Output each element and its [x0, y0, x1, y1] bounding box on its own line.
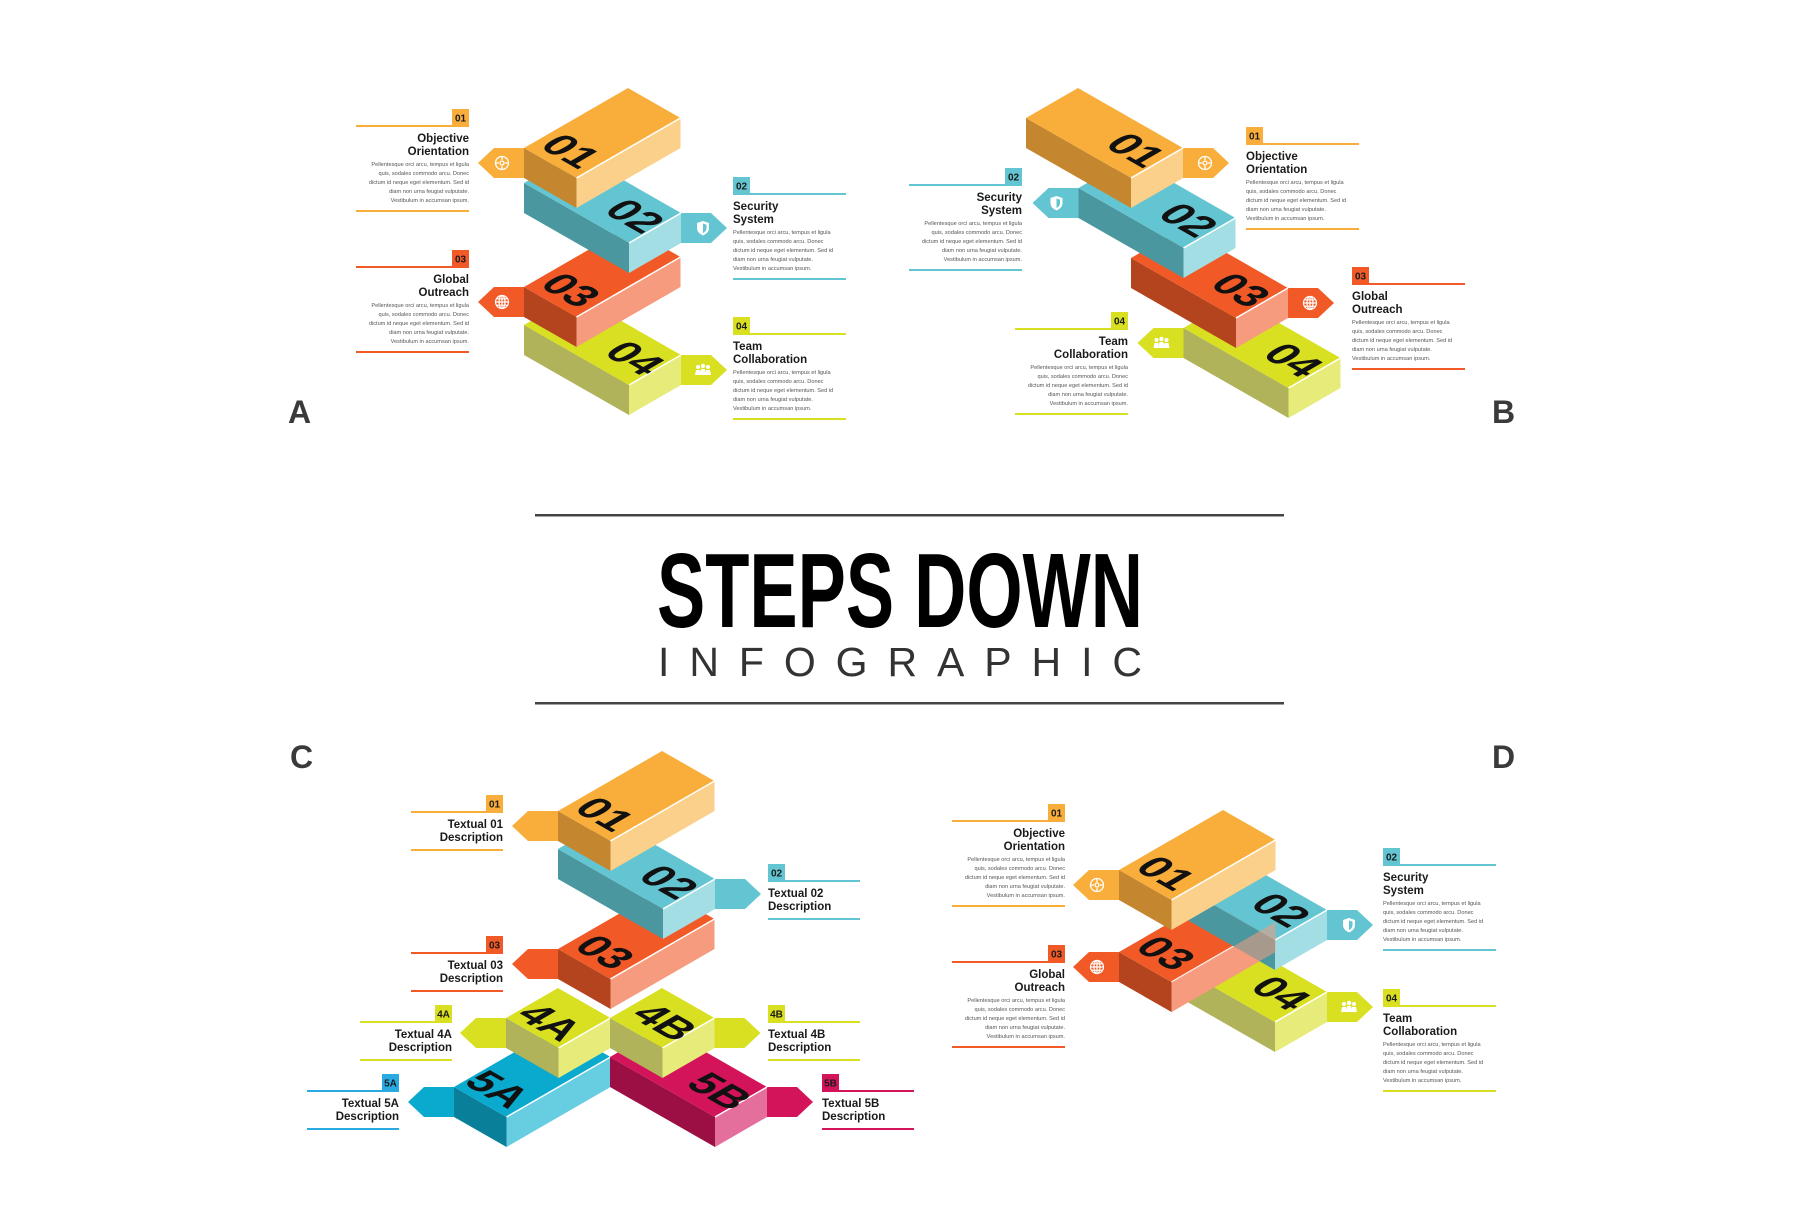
icon: globe — [496, 296, 508, 308]
text B 03 — [1352, 267, 1465, 370]
text A 04: dictum id neque eget elementum. Sed id — [733, 388, 833, 394]
text D 01: diam non urna feugiat vulputate. — [985, 884, 1065, 890]
tab B 03 — [1288, 288, 1334, 318]
text A 01: Vestibulum in accumsan ipsum. — [391, 198, 469, 204]
block A 04 — [524, 295, 727, 415]
text D 02: Vestibulum in accumsan ipsum. — [1383, 937, 1462, 943]
text D 04: dictum id neque eget elementum. Sed id — [1383, 1060, 1483, 1066]
text C 02: 02 — [771, 868, 782, 880]
text B 01: Orientation — [1246, 164, 1307, 176]
text B 04 — [1015, 312, 1129, 415]
text B 02: quis, sodales commodo arcu. Donec — [932, 230, 1022, 236]
number 4B: 4B — [621, 997, 709, 1047]
text A 03: Outreach — [418, 287, 469, 299]
number 03: 03 — [1125, 930, 1207, 976]
icon: shield — [1050, 196, 1062, 210]
text A 03: Vestibulum in accumsan ipsum. — [391, 339, 469, 345]
tab C 02 — [715, 879, 761, 909]
text B 03: dictum id neque eget elementum. Sed id — [1352, 338, 1452, 344]
text B 02: dictum id neque eget elementum. Sed id — [922, 239, 1022, 245]
text A 03: diam non urna feugiat vulputate. — [389, 330, 469, 336]
text D 02 — [1383, 848, 1496, 951]
tab C 5A — [408, 1087, 454, 1117]
tab C 03 — [512, 949, 558, 979]
number 5A: 5A — [454, 1064, 542, 1114]
text B 03: diam non urna feugiat vulputate. — [1352, 347, 1432, 353]
text B 03: quis, sodales commodo arcu. Donec — [1352, 329, 1443, 335]
text D 02: Pellentesque orci arcu, tempus et ligula — [1383, 901, 1481, 907]
text D 02: Security — [1383, 872, 1428, 884]
text B 01: Vestibulum in accumsan ipsum. — [1246, 216, 1325, 222]
block B 04 — [1138, 298, 1340, 418]
text A 04: diam non urna feugiat vulputate. — [733, 397, 813, 403]
text D 02: System — [1383, 885, 1424, 897]
text A 04: Vestibulum in accumsan ipsum. — [733, 406, 812, 412]
icon: target — [1198, 156, 1212, 170]
text C 01: 01 — [489, 800, 500, 810]
text C 5B: 5B — [824, 1078, 837, 1090]
text C 01: Description — [440, 832, 503, 844]
text D 03: quis, sodales commodo arcu. Donec — [975, 1007, 1065, 1013]
tab C 4A — [460, 1018, 506, 1048]
text A 03: 03 — [455, 254, 466, 266]
number 04: 04 — [594, 335, 676, 382]
block B 01 — [1026, 88, 1229, 208]
text C 5B: Description — [822, 1111, 885, 1123]
text A 04: Team — [733, 341, 762, 353]
panel A — [356, 88, 846, 420]
subtitle: INFOGRAPHIC: INFOGRAPHIC — [658, 639, 1142, 685]
text B 01: dictum id neque eget elementum. Sed id — [1246, 198, 1346, 204]
block D 01 — [1073, 810, 1276, 930]
text B 04: Collaboration — [1054, 349, 1128, 361]
tab B 04 — [1138, 328, 1184, 358]
panel letter A: A — [288, 394, 311, 430]
text B 01: Pellentesque orci arcu, tempus et ligula — [1246, 180, 1344, 186]
panel letter B: B — [1492, 394, 1515, 430]
block A 01 — [478, 88, 680, 208]
text A 03: Pellentesque orci arcu, tempus et ligula — [371, 303, 469, 309]
text C 5A: 5A — [384, 1078, 397, 1090]
block D 03 front face overlay — [1172, 922, 1276, 1012]
tab A 03 — [478, 287, 524, 317]
block A 02 — [524, 153, 727, 273]
tab D 04 — [1327, 992, 1373, 1022]
tab C 4B — [714, 1018, 760, 1048]
text A 02 — [733, 177, 846, 280]
text D 01: Objective — [1013, 828, 1065, 840]
block B 02 — [1032, 158, 1236, 278]
text A 01: 01 — [455, 114, 466, 124]
text C 4A — [360, 1005, 452, 1061]
text D 03: Vestibulum in accumsan ipsum. — [987, 1034, 1065, 1040]
text D 02: quis, sodales commodo arcu. Donec — [1383, 910, 1474, 916]
icon: people — [1341, 1001, 1357, 1012]
text B 04: diam non urna feugiat vulputate. — [1048, 392, 1128, 398]
text D 03: Global — [1029, 969, 1065, 981]
text D 03 — [952, 945, 1066, 1048]
number 04: 04 — [1253, 337, 1335, 384]
text A 04: 04 — [736, 322, 747, 332]
block C 5A — [408, 1027, 610, 1147]
text A 02: Pellentesque orci arcu, tempus et ligula — [733, 230, 831, 236]
text B 01: 01 — [1249, 132, 1260, 142]
text C 4B: Textual 4B — [768, 1029, 825, 1041]
text B 03: Pellentesque orci arcu, tempus et ligula — [1352, 320, 1450, 326]
text C 5A: Textual 5A — [342, 1098, 399, 1110]
text A 02: 02 — [736, 182, 747, 192]
icon: shield — [1343, 918, 1355, 932]
text A 01: diam non urna feugiat vulputate. — [389, 189, 469, 195]
text A 01: Objective — [417, 133, 469, 145]
text C 03: 03 — [489, 940, 500, 952]
text B 02 — [909, 168, 1023, 271]
text A 01: dictum id neque eget elementum. Sed id — [369, 180, 469, 186]
text C 4B: 4B — [770, 1010, 783, 1020]
block A 03 — [478, 227, 680, 347]
block C 02 — [558, 819, 761, 939]
icon: target — [1090, 878, 1104, 892]
text A 04: quis, sodales commodo arcu. Donec — [733, 379, 824, 385]
number 02: 02 — [1240, 887, 1322, 933]
text B 04: Team — [1099, 336, 1128, 348]
number 01: 01 — [530, 128, 612, 174]
text A 04 — [733, 317, 846, 420]
tab A 01 — [478, 148, 524, 178]
number 03: 03 — [564, 929, 646, 975]
text A 02: quis, sodales commodo arcu. Donec — [733, 239, 824, 245]
text B 04: quis, sodales commodo arcu. Donec — [1038, 374, 1128, 380]
title: STEPS DOWN: STEPS DOWN — [657, 532, 1143, 650]
text D 01: 01 — [1051, 808, 1062, 820]
text D 01: Vestibulum in accumsan ipsum. — [987, 893, 1065, 899]
text A 02: diam non urna feugiat vulputate. — [733, 257, 813, 263]
text A 01: Pellentesque orci arcu, tempus et ligula — [371, 162, 469, 168]
text D 02: diam non urna feugiat vulputate. — [1383, 928, 1463, 934]
text A 01: Orientation — [408, 146, 469, 158]
number 01: 01 — [1095, 127, 1177, 173]
text D 04: Collaboration — [1383, 1026, 1457, 1038]
panel letter C: C — [290, 739, 313, 775]
text C 5A: Description — [336, 1111, 399, 1123]
text D 03: dictum id neque eget elementum. Sed id — [965, 1016, 1065, 1022]
tab A 02 — [681, 213, 727, 243]
tab D 02 — [1327, 910, 1373, 940]
text C 02: Description — [768, 901, 831, 913]
panel B — [909, 88, 1465, 418]
text C 4B: Description — [768, 1042, 831, 1054]
text A 02: Security — [733, 201, 778, 213]
text C 03: Description — [440, 973, 503, 985]
text C 5A — [307, 1074, 399, 1130]
number 01: 01 — [564, 791, 646, 837]
text C 02 — [768, 864, 860, 920]
text B 03: Vestibulum in accumsan ipsum. — [1352, 356, 1431, 362]
number 02: 02 — [594, 193, 676, 239]
block D 03 — [1073, 892, 1276, 1012]
block C 4A — [460, 988, 610, 1078]
text B 03: Outreach — [1352, 304, 1402, 316]
panel C — [307, 751, 914, 1147]
panel D — [952, 804, 1496, 1092]
number 03: 03 — [530, 267, 612, 313]
block B 03 — [1131, 228, 1334, 348]
text D 04: 04 — [1386, 994, 1397, 1004]
icon: people — [695, 364, 711, 375]
text D 03: Outreach — [1014, 982, 1065, 994]
text C 01 — [411, 795, 504, 851]
text D 04 — [1383, 989, 1496, 1092]
text D 01: quis, sodales commodo arcu. Donec — [975, 866, 1065, 872]
text B 04: Pellentesque orci arcu, tempus et ligula — [1030, 365, 1128, 371]
text A 02: System — [733, 214, 774, 226]
text B 02: diam non urna feugiat vulputate. — [942, 248, 1022, 254]
number 02: 02 — [1148, 197, 1229, 243]
tab C 01 — [512, 811, 558, 841]
text D 04: Vestibulum in accumsan ipsum. — [1383, 1078, 1462, 1084]
text A 03 — [356, 250, 470, 353]
icon: target — [496, 156, 508, 170]
text D 01 — [952, 804, 1066, 907]
text D 01: dictum id neque eget elementum. Sed id — [965, 875, 1065, 881]
text A 04: Collaboration — [733, 354, 807, 366]
text C 02: Textual 02 — [768, 888, 823, 900]
title block — [535, 514, 1284, 704]
panel letter D: D — [1492, 739, 1515, 775]
text B 02: Vestibulum in accumsan ipsum. — [944, 257, 1022, 263]
block C 5B — [610, 1027, 813, 1147]
block C 4B — [610, 988, 760, 1078]
text C 4A: 4A — [437, 1010, 450, 1020]
icon: globe — [1304, 296, 1316, 310]
text B 01: quis, sodales commodo arcu. Donec — [1246, 189, 1337, 195]
text D 04: diam non urna feugiat vulputate. — [1383, 1069, 1463, 1075]
block C 03 — [512, 889, 714, 1009]
text B 02: Pellentesque orci arcu, tempus et ligula — [924, 221, 1022, 227]
text A 01: quis, sodales commodo arcu. Donec — [379, 171, 469, 177]
text A 03: dictum id neque eget elementum. Sed id — [369, 321, 469, 327]
number 01: 01 — [1125, 850, 1207, 896]
text C 4B — [768, 1005, 860, 1061]
number 5B: 5B — [676, 1066, 764, 1116]
text D 04: Pellentesque orci arcu, tempus et ligula — [1383, 1042, 1481, 1048]
text B 02: Security — [977, 192, 1022, 204]
tab B 02 — [1032, 188, 1078, 218]
text A 01 — [356, 109, 470, 212]
text B 01: Objective — [1246, 151, 1298, 163]
icon: globe — [1090, 960, 1104, 974]
text C 4A: Description — [389, 1042, 452, 1054]
text B 01 — [1246, 127, 1359, 230]
tab C 5B — [767, 1087, 813, 1117]
number 4A: 4A — [506, 997, 594, 1047]
text D 03: 03 — [1051, 950, 1062, 960]
block C 01 — [512, 751, 714, 871]
text D 03: diam non urna feugiat vulputate. — [985, 1025, 1065, 1031]
block D 02 — [1170, 850, 1373, 970]
text B 03: Global — [1352, 291, 1388, 303]
text A 03: quis, sodales commodo arcu. Donec — [379, 312, 469, 318]
text B 02: System — [981, 205, 1022, 217]
text D 03: Pellentesque orci arcu, tempus et ligula — [967, 998, 1065, 1004]
block D 04 — [1170, 932, 1373, 1052]
tab D 03 — [1073, 952, 1119, 982]
tab D 01 — [1073, 870, 1119, 900]
text A 02: Vestibulum in accumsan ipsum. — [733, 266, 812, 272]
text D 01: Orientation — [1004, 841, 1065, 853]
icon: people — [1154, 337, 1170, 348]
text A 04: Pellentesque orci arcu, tempus et ligula — [733, 370, 831, 376]
text C 01: Textual 01 — [448, 819, 503, 831]
text B 02: 02 — [1008, 172, 1019, 184]
text D 02: 02 — [1386, 852, 1397, 864]
text D 04: quis, sodales commodo arcu. Donec — [1383, 1051, 1474, 1057]
text C 03: Textual 03 — [448, 960, 503, 972]
text B 04: dictum id neque eget elementum. Sed id — [1028, 383, 1128, 389]
tab B 01 — [1183, 148, 1229, 178]
text C 03 — [411, 936, 503, 992]
text D 04: Team — [1383, 1013, 1412, 1025]
text D 01: Pellentesque orci arcu, tempus et ligula — [967, 857, 1065, 863]
text A 03: Global — [433, 274, 469, 286]
number 04: 04 — [1240, 970, 1322, 1017]
text A 02: dictum id neque eget elementum. Sed id — [733, 248, 833, 254]
text D 02: dictum id neque eget elementum. Sed id — [1383, 919, 1483, 925]
icon: shield — [697, 221, 709, 236]
text B 04: 04 — [1114, 316, 1125, 328]
text B 01: diam non urna feugiat vulputate. — [1246, 207, 1326, 213]
text C 5B: Textual 5B — [822, 1098, 879, 1110]
text B 03: 03 — [1355, 272, 1366, 282]
text B 04: Vestibulum in accumsan ipsum. — [1050, 401, 1128, 407]
number 03: 03 — [1200, 267, 1282, 313]
number 02: 02 — [628, 859, 710, 905]
tab A 04 — [681, 355, 727, 385]
text C 4A: Textual 4A — [395, 1029, 452, 1041]
text C 5B — [822, 1074, 914, 1130]
